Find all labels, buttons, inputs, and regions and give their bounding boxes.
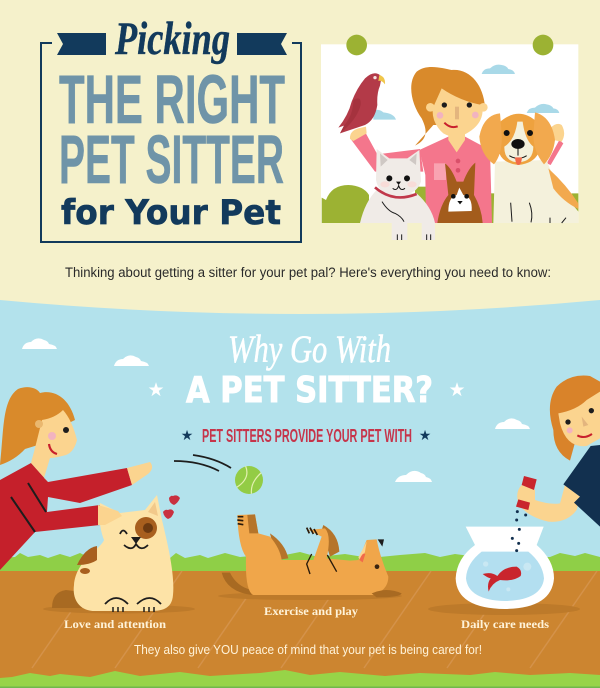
- navy stars: ★: [181, 428, 193, 444]
- heading: The Right: THE RIGHT: [59, 61, 285, 138]
- dog: [479, 112, 578, 223]
- hand petting cat: [98, 505, 122, 525]
- caption: love: Love and attention: [64, 619, 167, 631]
- subheading: PET SITTERS PROVIDE YOUR PET WITH: [202, 425, 412, 446]
- white stars: ★: [147, 379, 165, 401]
- bottom grass: [0, 670, 600, 688]
- sitter: [350, 67, 564, 223]
- heading: Pet Sitter: PET SITTER: [59, 121, 284, 198]
- white stars: [147, 379, 466, 401]
- goldfish: [483, 567, 521, 592]
- heading: Why Go With: Why Go With: [228, 328, 391, 371]
- navy stars: ★: [419, 428, 431, 444]
- rabbit: [437, 163, 483, 223]
- woman playing with cat: [0, 387, 152, 570]
- heading: Picking: Picking: [114, 13, 230, 65]
- sky heading: [147, 328, 466, 446]
- right ribbon: [237, 33, 287, 55]
- tennis ball: [235, 466, 263, 494]
- floor planks: [32, 571, 597, 668]
- dog on its back: [222, 514, 402, 597]
- left ribbon: [57, 33, 106, 55]
- bushes: [322, 185, 578, 223]
- caption: daily care: Daily care needs: [461, 619, 550, 631]
- ground: [0, 571, 600, 681]
- cat: [52, 495, 180, 612]
- heading: for Your Pet: for Your Pet: [61, 193, 281, 233]
- motion lines: [174, 455, 231, 471]
- navy stars: [181, 428, 431, 444]
- heading: A Pet Sitter?: A PET SITTER?: [186, 370, 433, 411]
- ground shadows: [43, 592, 580, 615]
- woman feeding fish: [515, 376, 600, 527]
- title block: [41, 13, 301, 242]
- grass: [0, 552, 600, 571]
- pins: [346, 35, 553, 55]
- intro text: Thinking about getting a sitter for your pet pal? Here's everything you need to know:: [65, 265, 551, 280]
- clouds: [373, 65, 559, 120]
- clouds in sky: [22, 338, 530, 482]
- hearts: [163, 495, 180, 519]
- white stars: ★: [448, 379, 466, 401]
- cat: [360, 149, 435, 240]
- parrot: [338, 73, 385, 133]
- photo card: sitter with pets: [321, 35, 578, 240]
- fish bowl: [456, 527, 554, 609]
- caption: exercise: Exercise and play: [264, 606, 358, 618]
- sky panel: [0, 300, 600, 688]
- closing text: They also give YOU peace of mind that your pet is being cared for!: [134, 642, 482, 657]
